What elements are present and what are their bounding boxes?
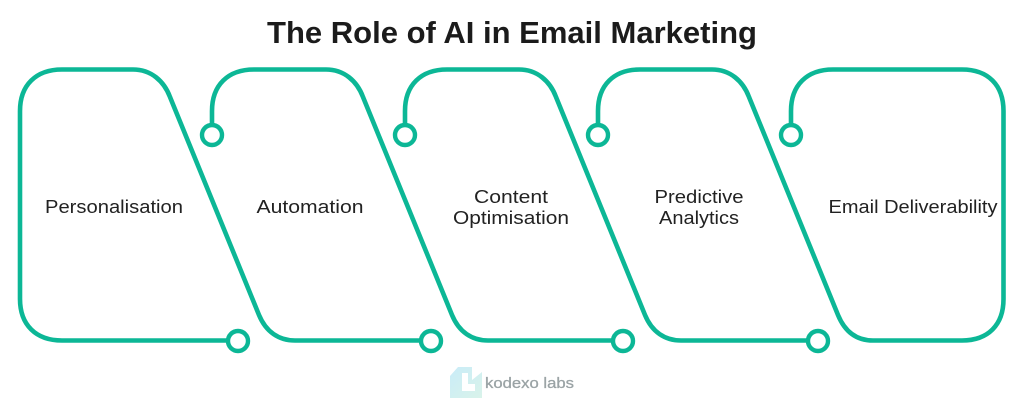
icon: connector circle 2 (202, 125, 222, 145)
label: content optimisation: Optimisation (453, 208, 569, 228)
label: predictive analytics: Analytics (659, 208, 739, 228)
label: automation: Automation (256, 197, 364, 217)
label: content optimisation: Content (474, 187, 548, 207)
label: predictive analytics (654, 187, 744, 228)
icon: connector circle 3 (395, 125, 415, 145)
label: personalisation: Personalisation (45, 197, 183, 217)
label: content optimisation (453, 187, 569, 228)
logo: kodexo labs (450, 367, 574, 398)
panel: automation (202, 70, 613, 340)
title: The Role of AI in Email Marketing (267, 15, 757, 50)
logo wordmark: kodexo labs (485, 375, 574, 392)
icon: connector circle 7 (808, 331, 828, 351)
icon: connector circle 4 (588, 125, 608, 145)
icon: connector circle 6 (613, 331, 633, 351)
panel: predictive analytics (588, 70, 1004, 340)
icon: logo mark (450, 367, 482, 398)
icon: connector circle 5 (421, 331, 441, 351)
label: predictive analytics: Predictive (654, 187, 744, 207)
label: email deliverability: Email Deliverability (828, 197, 998, 217)
icon: connector circle 8 (781, 125, 801, 145)
panel: personalisation (20, 70, 421, 351)
icon: connector circle 1 (228, 331, 248, 351)
panel: content optimisation (395, 70, 808, 340)
